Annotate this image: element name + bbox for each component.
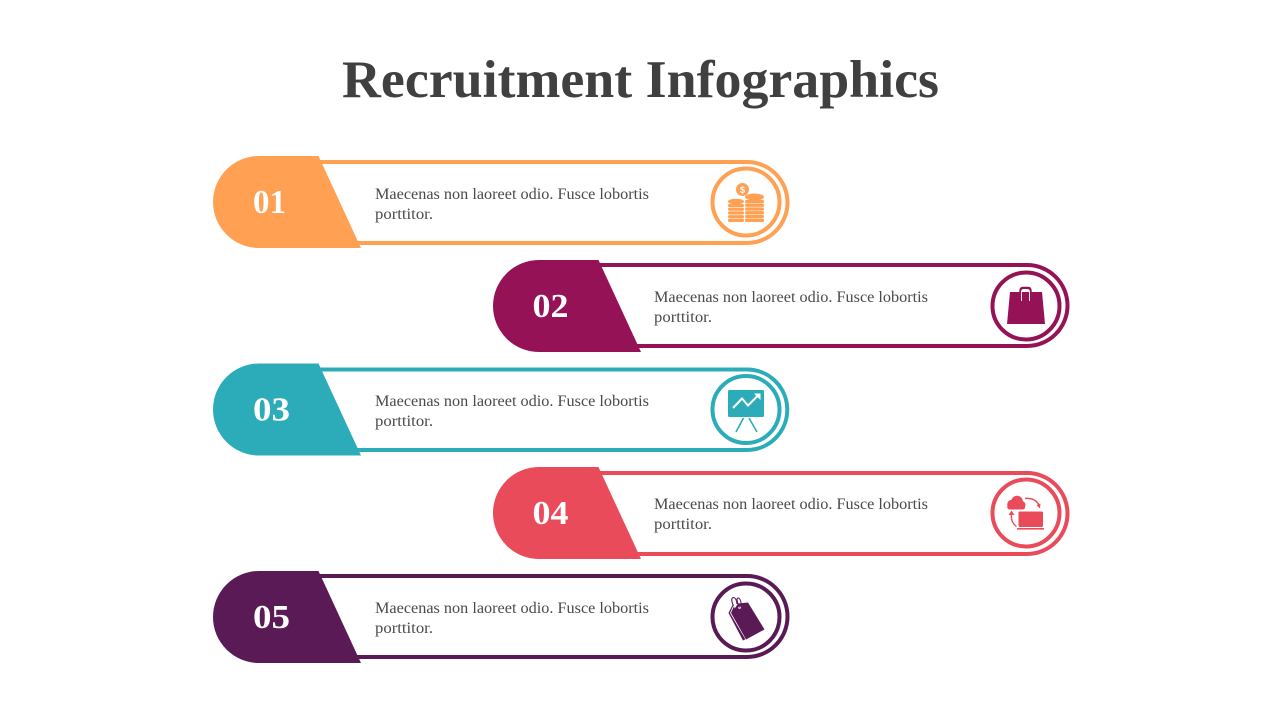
text block 05: [375, 600, 649, 637]
text block 03: [375, 393, 649, 430]
icon ring 03: [712, 376, 780, 443]
panel: step 03: [213, 364, 787, 456]
band outline 04: [598, 473, 1068, 554]
number tab 04: [493, 467, 641, 559]
text block 04: Maecenas non laoreet odio. Fusce lobortis: [654, 496, 928, 513]
icon: cloud and laptop: [1007, 496, 1044, 530]
title: Recruitment Infographics: [342, 51, 939, 109]
icon: price tags: [728, 598, 764, 640]
panel: step 05: [213, 571, 788, 663]
number 04: 04: [532, 495, 568, 532]
band outline 02: [598, 265, 1068, 346]
icon: shopping bag: [1007, 288, 1045, 324]
text block 01: porttitor.: [375, 206, 433, 223]
text block 05: porttitor.: [375, 620, 433, 637]
text block 04: porttitor.: [654, 516, 712, 533]
text block 05: Maecenas non laoreet odio. Fusce lobortis: [375, 600, 649, 617]
number tab 03: [213, 364, 361, 456]
icon ring 05: [712, 584, 780, 650]
panel: step 01: [213, 156, 788, 248]
number 05: 05: [253, 599, 290, 636]
text block 02: [654, 289, 928, 326]
icon: coins: $: [740, 185, 745, 195]
number 03: 03: [253, 392, 290, 428]
panel: step 02: [493, 260, 1068, 352]
text block 02: porttitor.: [654, 309, 712, 326]
text block 03: porttitor.: [375, 413, 433, 430]
text block 02: Maecenas non laoreet odio. Fusce lobortis: [654, 289, 928, 306]
text block 04: [654, 496, 928, 533]
number 01: 01: [253, 184, 286, 221]
number tab 05: [213, 571, 361, 663]
panel: step 04: [493, 467, 1068, 559]
text block 01: [375, 186, 649, 223]
icon ring 02: [992, 272, 1060, 340]
icon ring 01: [712, 168, 780, 236]
icon: presentation board: [728, 390, 764, 432]
number tab 01: [213, 156, 361, 248]
band outline 01: [318, 162, 788, 243]
text block 03: Maecenas non laoreet odio. Fusce lobortis: [375, 393, 649, 410]
number tab 02: [493, 260, 641, 352]
number 02: 02: [532, 288, 568, 325]
band outline 03: [318, 370, 787, 450]
icon: coins: [728, 183, 764, 222]
band outline 05: [318, 576, 788, 657]
icon ring 04: [992, 480, 1060, 546]
text block 01: Maecenas non laoreet odio. Fusce lobortis: [375, 186, 649, 203]
